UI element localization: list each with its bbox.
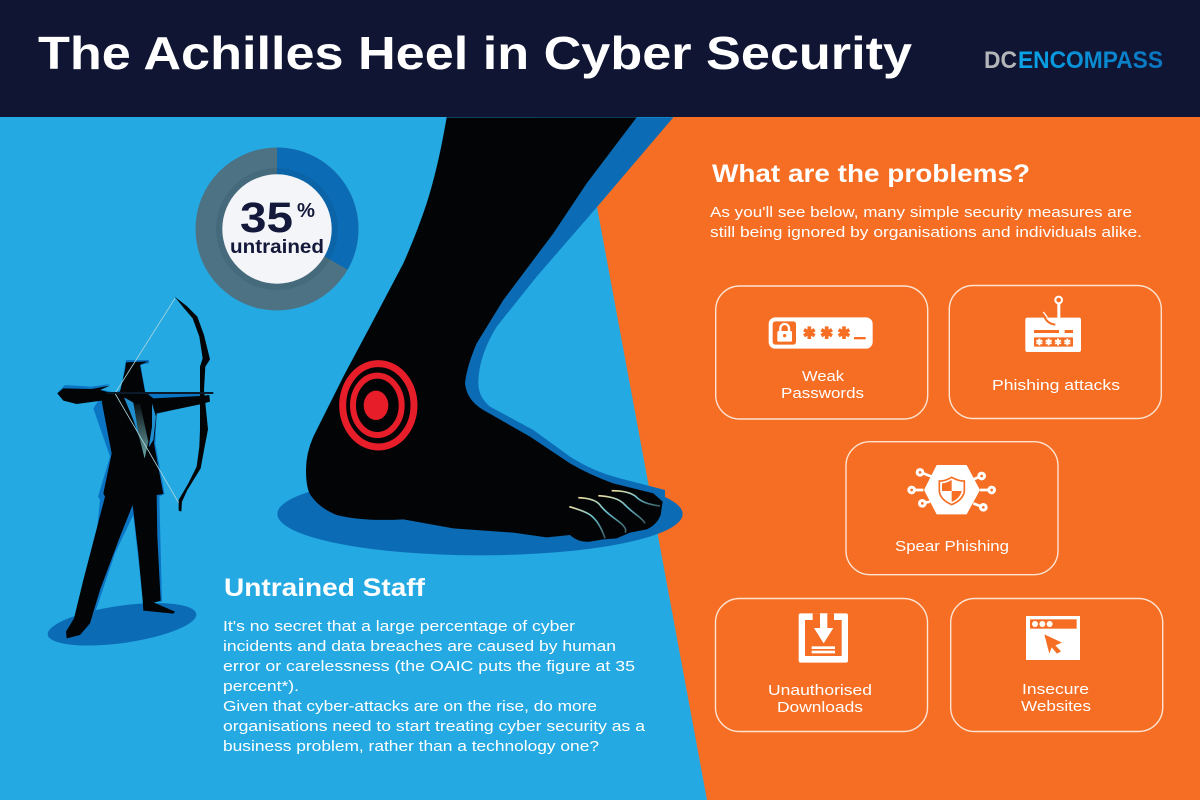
text block: problems intro: still being ignored by organisations and individuals alike. xyxy=(710,225,1142,241)
card: weak passwords xyxy=(716,286,928,419)
donut chart: 35% untrained: untrained xyxy=(230,237,324,258)
header band xyxy=(0,0,1200,117)
card: unauthorised downloads: Downloads xyxy=(777,699,863,716)
label: Spear Phishing xyxy=(895,538,1009,555)
icon: browser window with cursor xyxy=(1026,616,1080,660)
bow xyxy=(175,297,210,512)
archer ground shadow xyxy=(45,595,199,653)
background: orange panel xyxy=(597,117,1200,800)
text block: problems intro: As you'll see below, many simple security measures are xyxy=(710,205,1132,221)
icon: phishing hook on login card xyxy=(1025,297,1081,352)
card: phishing attacks xyxy=(949,286,1161,418)
text block: untrained staff description: percent*). xyxy=(223,679,299,695)
icon: shield in circuit hexagon xyxy=(907,465,996,514)
card: weak passwords: Passwords xyxy=(781,385,864,402)
card: unauthorised downloads xyxy=(716,598,928,732)
donut chart: 35% untrained: % xyxy=(297,200,315,222)
text block: untrained staff description: error or carelessness (the OAIC puts the figure at 35 xyxy=(223,659,635,675)
archer silhouette xyxy=(57,361,210,638)
text block: untrained staff description: Given that cyber-attacks are on the rise, do more xyxy=(223,699,597,715)
foot blue outline xyxy=(437,117,673,510)
archer blue offset shadow xyxy=(57,360,200,623)
text block: untrained staff description: business problem, rather than a technology one? xyxy=(223,739,599,755)
label: Insecure xyxy=(1022,681,1089,698)
icon: download into tray xyxy=(799,613,848,663)
target on heel xyxy=(343,364,414,447)
card: insecure websites xyxy=(951,598,1163,732)
foot illustration xyxy=(277,117,683,555)
arrow shaft xyxy=(107,392,213,394)
bow string xyxy=(115,298,179,504)
archer shirt and tie xyxy=(124,397,140,440)
foot ground shadow xyxy=(277,473,683,555)
text block: problems intro xyxy=(710,205,1142,241)
logo: ENCOMPASS xyxy=(1018,47,1163,74)
label: Weak xyxy=(802,368,845,385)
logo: DC xyxy=(984,47,1017,74)
card: insecure websites: Websites xyxy=(1021,698,1091,715)
foot silhouette xyxy=(306,117,663,542)
archer illustration xyxy=(45,297,213,653)
title: The Achilles Heel in Cyber Security xyxy=(38,27,912,79)
icon: password field xyxy=(769,317,873,349)
text block: untrained staff description: incidents and data breaches are caused by human xyxy=(223,639,616,655)
heading: Untrained Staff: Untrained Staff xyxy=(224,574,426,602)
donut chart: 35% untrained: 35 xyxy=(240,194,293,242)
text block: untrained staff description: It's no secret that a large percentage of cyber xyxy=(223,619,575,635)
label: Phishing attacks xyxy=(992,377,1120,394)
card: spear phishing xyxy=(846,442,1058,575)
donut chart: 35% untrained xyxy=(196,148,358,310)
text block: untrained staff description xyxy=(223,619,646,755)
heading: What are the problems?: What are the problems? xyxy=(712,160,1030,188)
text block: untrained staff description: organisations need to start treating cyber security as a xyxy=(223,719,646,735)
label: Unauthorised xyxy=(768,682,872,699)
toe highlights xyxy=(569,491,660,538)
